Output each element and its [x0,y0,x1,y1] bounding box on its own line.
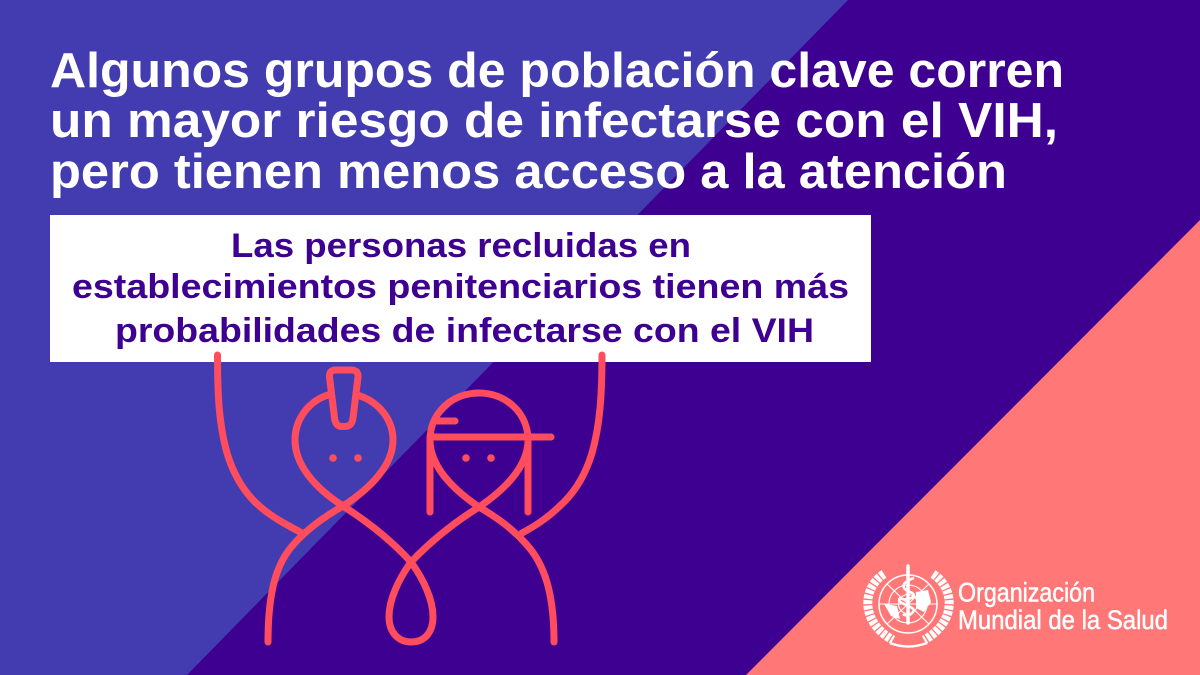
panel: subtitle box [50,215,871,362]
left arm [218,355,302,533]
illustration: two people with raised arms [218,355,602,642]
right arm [522,355,602,533]
logo text: Mundial de la Salud [958,605,1168,635]
subtitle text: probabilidades de infectarse con el VIH [115,312,814,350]
icon: emblem [868,566,949,646]
title: un mayor riesgo de infectarse con el VIH, [50,93,1058,148]
headband [430,434,551,440]
left person head and body [268,395,343,642]
title: pero tienen menos acceso a la atención [50,144,1007,199]
panel: coral corner [746,220,1200,675]
logo text [958,578,1168,635]
title: Algunos grupos de población clave corren [50,43,1064,98]
continuous ribbon: left head, loop, right head [343,393,554,642]
subtitle text [72,227,849,350]
fringe [437,418,455,424]
logo: World Health Organization [868,566,1168,646]
title [50,43,1064,199]
left hair [426,440,434,512]
subtitle text: Las personas recluidas en [231,227,691,265]
mohawk [329,370,358,426]
right hair [524,440,532,512]
eyes [329,454,495,462]
subtitle text: establecimientos penitenciarios tienen más [72,268,849,306]
logo text: Organización [958,578,1095,608]
